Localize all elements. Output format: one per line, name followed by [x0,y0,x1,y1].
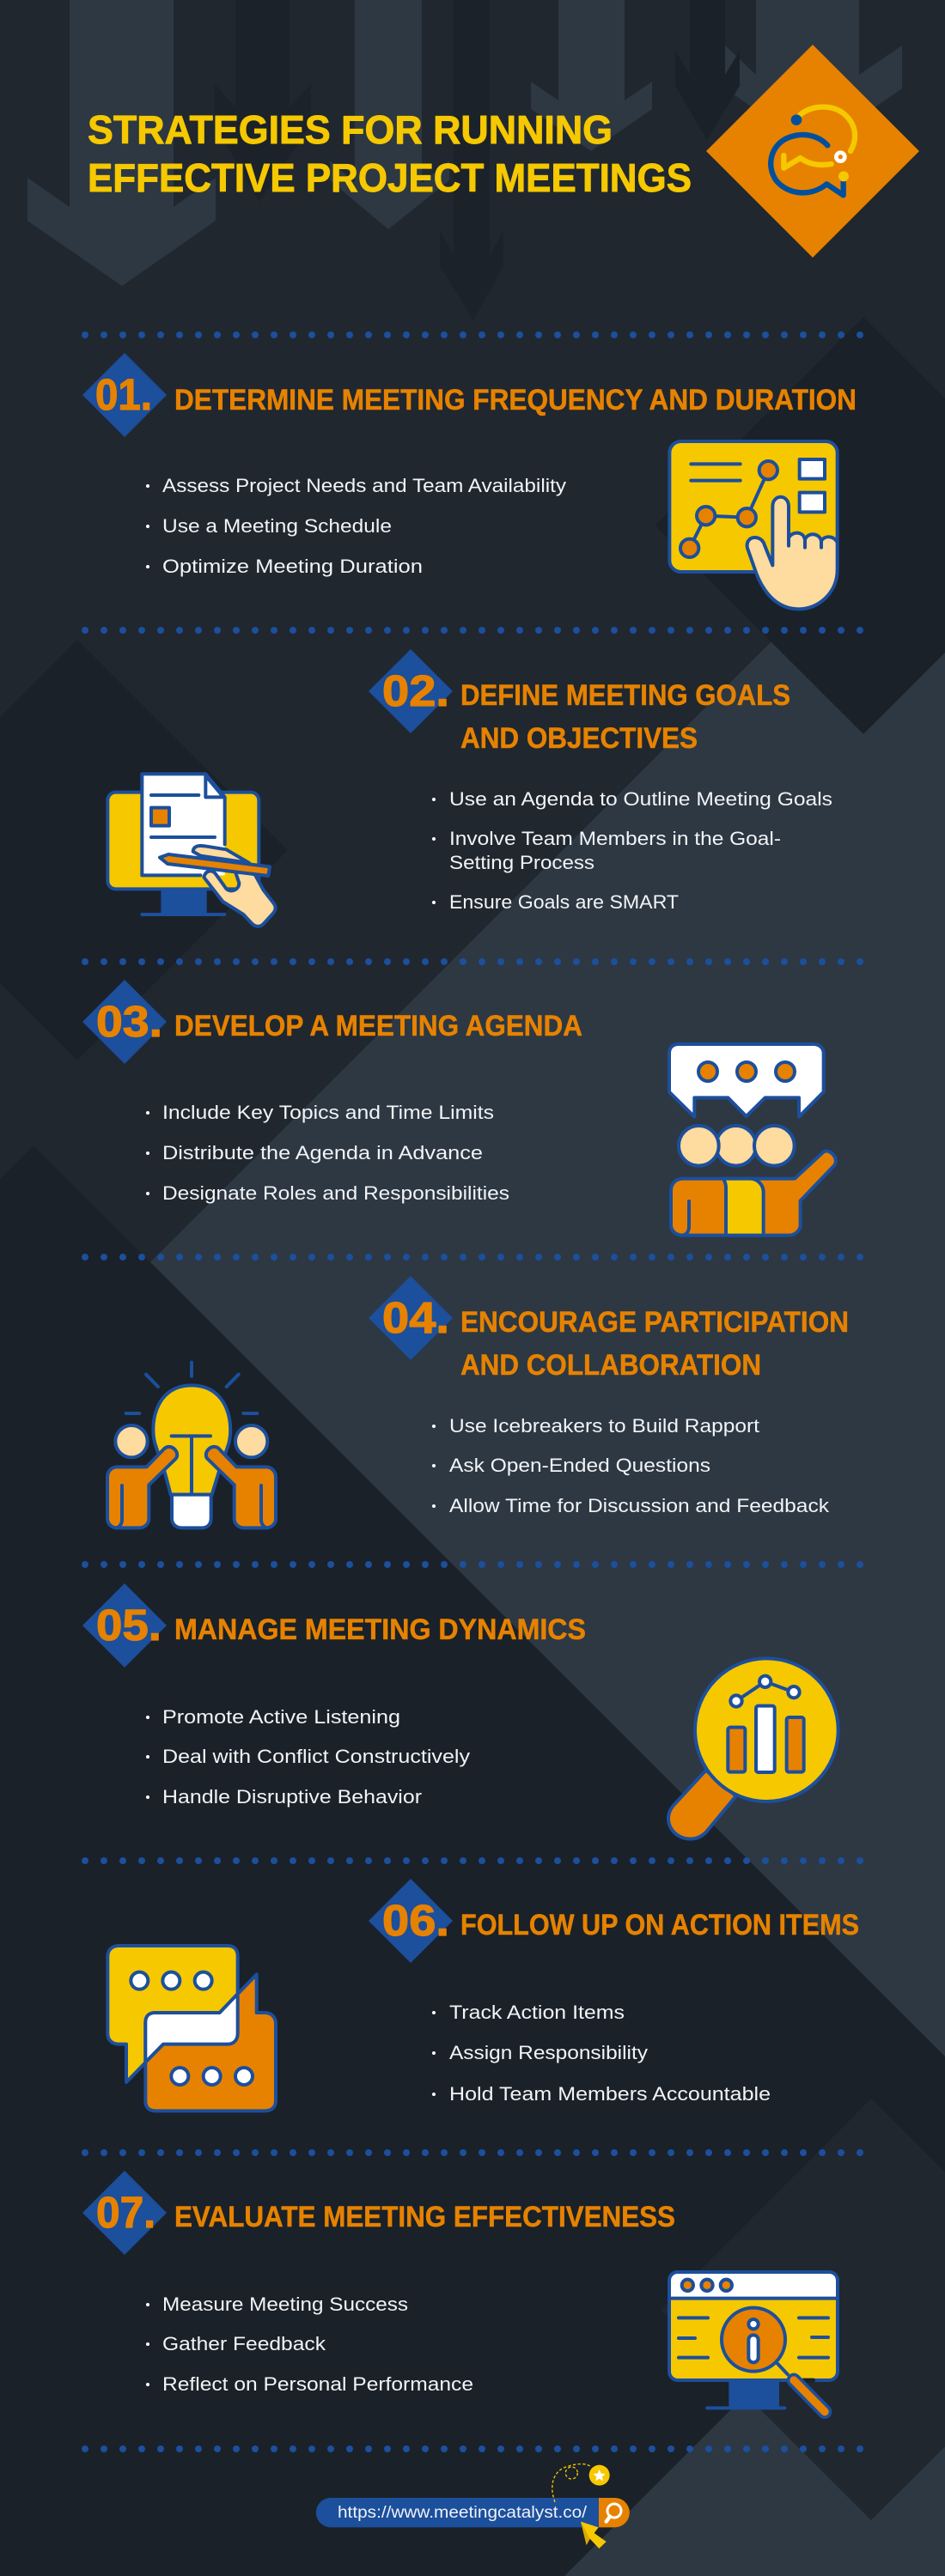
number badge 05: 05. [96,1601,162,1649]
bullet list 06: Track Action Items [449,2002,625,2023]
heading 04: ENCOURAGE PARTICIPATION [460,1306,849,1339]
bullet list 03: Include Key Topics and Time Limits [162,1102,494,1123]
number badge 06 [369,1879,453,1963]
icon: touch chart board [669,441,838,609]
bullet list 05 [146,1706,470,1807]
number badge 03: 03. [96,997,162,1046]
bullet list 02: Ensure Goals are SMART [449,891,679,913]
bullet list 02 [432,788,832,913]
number badge 01 [82,353,167,437]
bullet list 01: Use a Meeting Schedule [162,515,392,537]
bullet list 06: Hold Team Members Accountable [449,2083,771,2105]
number badge 06: 06. [382,1896,449,1945]
footer: url bar with search button and cursor: https://www.meetingcatalyst.co/ [338,2504,588,2522]
icon: magnifier with bar chart [668,1658,838,1839]
bullet list 07: Reflect on Personal Performance [162,2373,473,2395]
heading 01: DETERMINE MEETING FREQUENCY AND DURATION [174,384,857,416]
section 05 [82,1583,838,1839]
number badge 03 [82,980,167,1064]
section 06 [107,1879,859,2111]
icon: two people with light bulb [107,1363,276,1528]
heading 02: DEFINE MEETING GOALS [460,679,790,712]
title: STRATEGIES FOR RUNNING [88,107,613,152]
icon: overlapping speech bubbles [107,1946,276,2111]
number badge 07 [82,2171,167,2255]
heading 04: AND COLLABORATION [460,1349,761,1382]
bullet list 07: Measure Meeting Success [162,2293,408,2315]
bullet list 05: Promote Active Listening [162,1706,400,1728]
heading 04 [460,1306,849,1382]
heading 07: EVALUATE MEETING EFFECTIVENESS [174,2201,675,2233]
section 01 [82,353,857,609]
number badge 01: 01. [95,370,152,419]
title [88,107,692,200]
bullet list 05: Deal with Conflict Constructively [162,1746,470,1767]
bullet list 07 [146,2293,473,2395]
title: EFFECTIVE PROJECT MEETINGS [88,155,692,200]
number badge 04 [369,1276,453,1360]
logo badge [706,45,919,258]
bullet list 06 [432,2002,771,2105]
bullet list 04 [432,1415,830,1516]
bullet list 01 [146,475,566,577]
bullet list 02: Use an Agenda to Outline Meeting Goals [449,788,832,810]
number badge 07: 07. [96,2188,155,2237]
bullet list 04: Ask Open-Ended Questions [449,1455,710,1476]
bullet list 06: Assign Responsibility [449,2042,648,2063]
bullet list 02: Setting Process [449,852,594,873]
heading 03: DEVELOP A MEETING AGENDA [174,1010,582,1042]
heading 06: FOLLOW UP ON ACTION ITEMS [460,1909,859,1941]
icon: team with speech bubble [669,1044,836,1236]
number badge 02 [369,649,453,733]
icon: browser window with magnifier [669,2272,838,2412]
section 04 [107,1276,849,1528]
number badge 02: 02. [382,666,449,715]
bullet list 02: Involve Team Members in the Goal- [449,828,781,849]
heading 05: MANAGE MEETING DYNAMICS [174,1613,586,1646]
bullet list 04: Allow Time for Discussion and Feedback [449,1495,830,1516]
footer: url bar with search button and cursor [316,2464,630,2549]
number badge 05 [82,1583,167,1668]
bullet list 01: Assess Project Needs and Team Availability [162,475,566,496]
section 02 [107,649,832,927]
heading 02 [460,679,790,755]
bullet list 03: Designate Roles and Responsibilities [162,1182,509,1204]
bullet list 03 [146,1102,509,1204]
section 07 [82,2171,838,2412]
background: downward arrows [27,0,902,320]
icon: document on monitor with hand and pencil [107,774,276,927]
bullet list 07: Gather Feedback [162,2333,326,2354]
bullet list 05: Handle Disruptive Behavior [162,1786,422,1807]
heading 02: AND OBJECTIVES [460,722,698,755]
section 03 [82,980,836,1236]
number badge 04: 04. [382,1293,449,1342]
bullet list 03: Distribute the Agenda in Advance [162,1142,483,1163]
bullet list 04: Use Icebreakers to Build Rapport [449,1415,759,1437]
bullet list 01: Optimize Meeting Duration [162,556,423,577]
